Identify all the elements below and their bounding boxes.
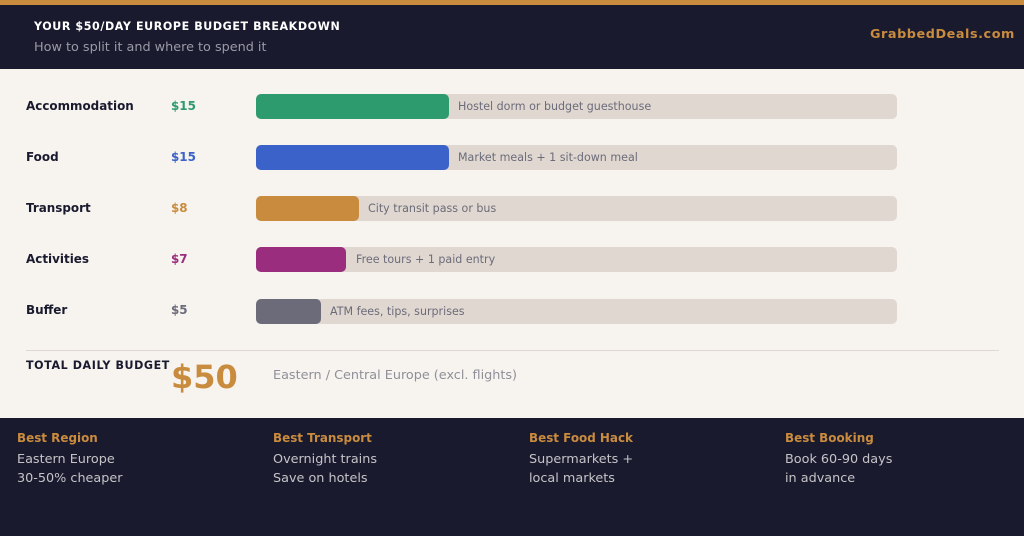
row: buffer: Buffer (26, 303, 67, 317)
tip: best food hack: local markets (529, 471, 615, 486)
accent stripe (0, 0, 1024, 5)
tip: best booking: Book 60-90 days (785, 452, 892, 467)
row: accommodation: Hostel dorm or budget guesthouse (458, 100, 651, 113)
row: transport: City transit pass or bus (368, 202, 496, 215)
row: transport: Transport (26, 200, 91, 214)
row: transport (26, 196, 897, 221)
row: buffer: ATM fees, tips, surprises (330, 304, 465, 318)
tip: best food hack (529, 431, 634, 486)
title: YOUR $50/DAY EUROPE BUDGET BREAKDOWN (34, 20, 340, 32)
footer band (0, 418, 1024, 536)
tip: best region: Eastern Europe (17, 452, 115, 467)
total note: Eastern / Central Europe (excl. flights) (273, 368, 517, 383)
tip: best region: Best Region (17, 431, 98, 445)
row: food: Food (26, 150, 59, 164)
row: activities: $7 (171, 252, 188, 266)
subtitle: How to split it and where to spend it (34, 40, 266, 55)
row: buffer (26, 299, 897, 324)
tip: best food hack: Best Food Hack (529, 431, 633, 445)
row: accommodation: $15 (171, 98, 196, 112)
tip: best booking (785, 431, 892, 486)
tip: best transport: Best Transport (273, 431, 372, 445)
tip: best food hack: Supermarkets + (529, 452, 633, 467)
row: activities: Activities (26, 252, 89, 266)
total label: TOTAL DAILY BUDGET (26, 359, 170, 372)
row: activities: Free tours + 1 paid entry (356, 253, 495, 266)
tip: best booking: Best Booking (785, 431, 874, 445)
row: buffer: $5 (171, 303, 188, 317)
tip: best transport: Overnight trains (273, 452, 377, 467)
tip: best transport (273, 431, 377, 486)
row: food: Market meals + 1 sit-down meal (458, 151, 638, 164)
row: accommodation (26, 94, 897, 119)
tip: best region: 30-50% cheaper (17, 471, 123, 486)
tip: best region (17, 431, 123, 486)
row: accommodation: Accommodation (26, 98, 134, 112)
brand: GrabbedDeals.com (870, 27, 1015, 42)
row: transport: $8 (171, 200, 188, 214)
row: food: $15 (171, 150, 196, 164)
row: food (26, 145, 897, 170)
tip: best transport: Save on hotels (273, 471, 368, 486)
header band (0, 0, 1024, 69)
tip: best booking: in advance (785, 471, 855, 486)
total value: $50 (171, 358, 238, 396)
row: activities (26, 247, 897, 272)
